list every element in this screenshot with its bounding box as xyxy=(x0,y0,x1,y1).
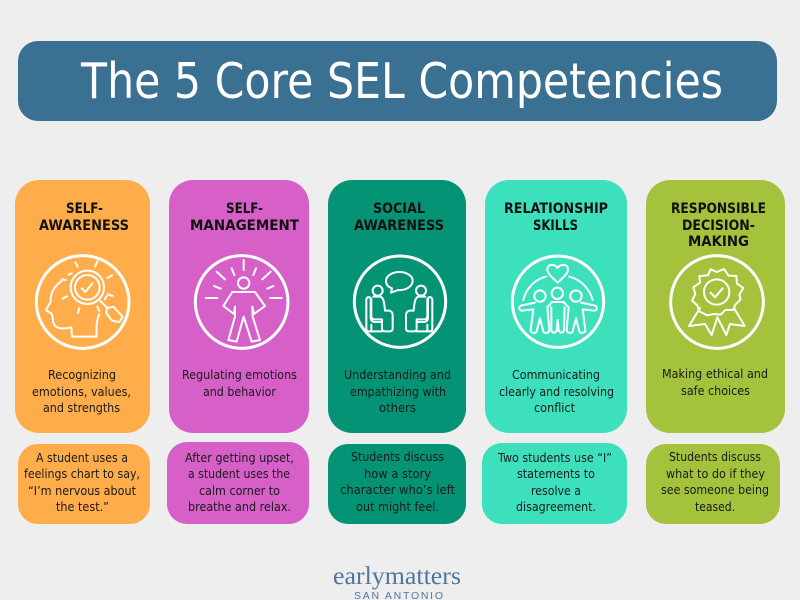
description: responsible decision-making: Making ethical and xyxy=(662,367,768,381)
description: social awareness xyxy=(344,368,451,415)
example card: relationship skills xyxy=(482,443,627,524)
heading: relationship skills: RELATIONSHIP xyxy=(504,201,608,217)
example card: self-awareness xyxy=(18,444,150,524)
panel: relationship skills xyxy=(485,180,627,433)
icon: standing person with rays xyxy=(195,256,288,348)
example card: self-management: a student uses the xyxy=(188,467,290,481)
heading: self-management xyxy=(190,201,299,234)
description: relationship skills: Communicating xyxy=(512,368,600,382)
description: self-awareness xyxy=(32,368,131,415)
example card: self-management: After getting upset, xyxy=(185,451,294,465)
heading: responsible decision-making: MAKING xyxy=(688,234,749,250)
example card: social awareness: out might feel. xyxy=(356,500,439,514)
heading: self-awareness: AWARENESS xyxy=(39,218,129,234)
example card: self-management: breathe and relax. xyxy=(188,500,291,514)
example card: social awareness: how a story xyxy=(364,467,431,481)
heading: relationship skills xyxy=(504,201,608,234)
panel: responsible decision-making xyxy=(646,180,785,433)
heading: relationship skills: SKILLS xyxy=(533,218,578,234)
example card: social awareness: character who’s left xyxy=(340,483,455,497)
panel: social awareness xyxy=(328,180,466,433)
example card: self-awareness: feelings chart to say, xyxy=(24,467,140,481)
title banner: The 5 Core SEL Competencies xyxy=(80,53,723,110)
example card: social awareness xyxy=(328,444,466,524)
example card: self-awareness: “I’m nervous about xyxy=(28,484,136,498)
icon: award ribbon badge xyxy=(671,256,763,348)
heading: social awareness: SOCIAL xyxy=(373,201,425,217)
example card: responsible decision-making: teased. xyxy=(695,500,735,514)
example card: self-management xyxy=(167,442,309,524)
heading: self-awareness xyxy=(39,201,129,234)
description: relationship skills xyxy=(499,368,614,415)
heading: responsible decision-making: RESPONSIBLE xyxy=(671,201,766,217)
example card: relationship skills: statements to xyxy=(517,467,595,481)
example card: self-management: calm corner to xyxy=(199,484,280,498)
example card: relationship skills: disagreement. xyxy=(516,500,596,514)
description: self-awareness: emotions, values, xyxy=(32,385,131,399)
example card: social awareness: Students discuss xyxy=(351,450,444,464)
example card: responsible decision-making: Students discuss xyxy=(669,450,761,464)
panel: self-management xyxy=(169,180,309,433)
description: social awareness: empathizing with xyxy=(350,385,446,399)
icon: group with heart xyxy=(512,256,604,347)
panel: self-awareness xyxy=(15,180,150,433)
icon: head with magnifying glass xyxy=(36,256,129,348)
example card: responsible decision-making: see someone being xyxy=(661,483,769,497)
description: responsible decision-making xyxy=(662,367,768,398)
example card: self-awareness: A student uses a xyxy=(36,451,128,465)
heading: self-awareness: SELF- xyxy=(66,201,103,217)
heading: social awareness: AWARENESS xyxy=(354,218,444,234)
heading: social awareness xyxy=(354,201,444,234)
heading: self-management: MANAGEMENT xyxy=(190,218,299,234)
description: self-management: and behavior xyxy=(203,385,277,399)
heading: self-management: SELF- xyxy=(226,201,263,217)
example card: self-awareness: the test.” xyxy=(56,500,109,514)
example card: relationship skills: Two students use “I” xyxy=(497,451,612,465)
description: relationship skills: clearly and resolving xyxy=(499,385,614,399)
example card: responsible decision-making: what to do if they xyxy=(666,467,765,481)
description: relationship skills: conflict xyxy=(534,401,575,415)
example card: relationship skills: resolve a xyxy=(531,484,581,498)
title banner xyxy=(18,41,777,121)
heading: responsible decision-making: DECISION- xyxy=(682,218,755,234)
description: self-awareness: and strengths xyxy=(43,401,120,415)
icon: two people talking xyxy=(354,256,446,347)
logo: earlymatters San Antonio: earlymatters xyxy=(333,563,461,590)
description: responsible decision-making: safe choices xyxy=(681,384,750,398)
heading: responsible decision-making xyxy=(671,201,766,250)
example card: responsible decision-making xyxy=(646,444,780,524)
description: self-management: Regulating emotions xyxy=(182,368,297,382)
description: self-management xyxy=(182,368,297,399)
description: social awareness: Understanding and xyxy=(344,368,451,382)
description: self-awareness: Recognizing xyxy=(48,368,116,382)
description: social awareness: others xyxy=(379,401,416,415)
